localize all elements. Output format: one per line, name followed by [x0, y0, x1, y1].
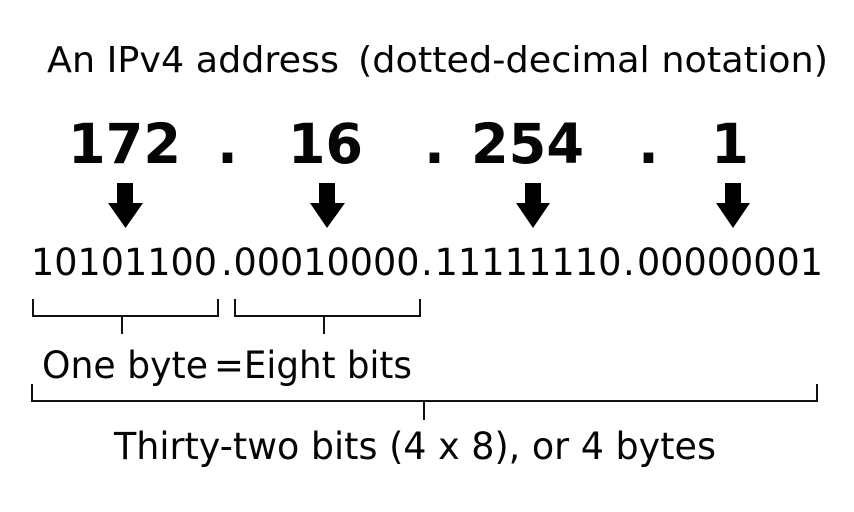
binary address: 00010000: [234, 241, 420, 284]
binary address: .: [221, 241, 233, 284]
label: thirty-two bits: Thirty-two bits (4 x 8), or 4 bytes: [113, 425, 716, 468]
binary address: .: [421, 241, 433, 284]
binary address: [31, 241, 823, 284]
dotted-decimal numbers: 1: [711, 112, 749, 176]
label: one byte equals eight bits: One byte: [42, 344, 208, 387]
bracket: whole address: [32, 384, 817, 420]
binary address: 00000001: [637, 241, 823, 284]
dotted-decimal numbers: .: [638, 112, 659, 176]
title: [47, 40, 828, 81]
bracket: second byte: [235, 299, 420, 334]
dotted-decimal numbers: 254: [471, 112, 584, 176]
binary address: .: [623, 241, 635, 284]
title: (dotted-decimal notation): [358, 40, 828, 81]
dotted-decimal numbers: .: [424, 112, 445, 176]
dotted-decimal numbers: .: [217, 112, 238, 176]
binary address: 10101100: [31, 241, 217, 284]
title: An IPv4 address: [47, 40, 339, 81]
bracket: first byte: [33, 299, 218, 334]
dotted-decimal numbers: 172: [68, 112, 181, 176]
label: one byte equals eight bits: =Eight bits: [214, 344, 412, 387]
label: one byte equals eight bits: [42, 344, 412, 387]
dotted-decimal numbers: [68, 112, 749, 176]
binary address: 11111110: [434, 241, 622, 284]
dotted-decimal numbers: 16: [288, 112, 363, 176]
arrows from decimal to binary: [108, 183, 750, 228]
